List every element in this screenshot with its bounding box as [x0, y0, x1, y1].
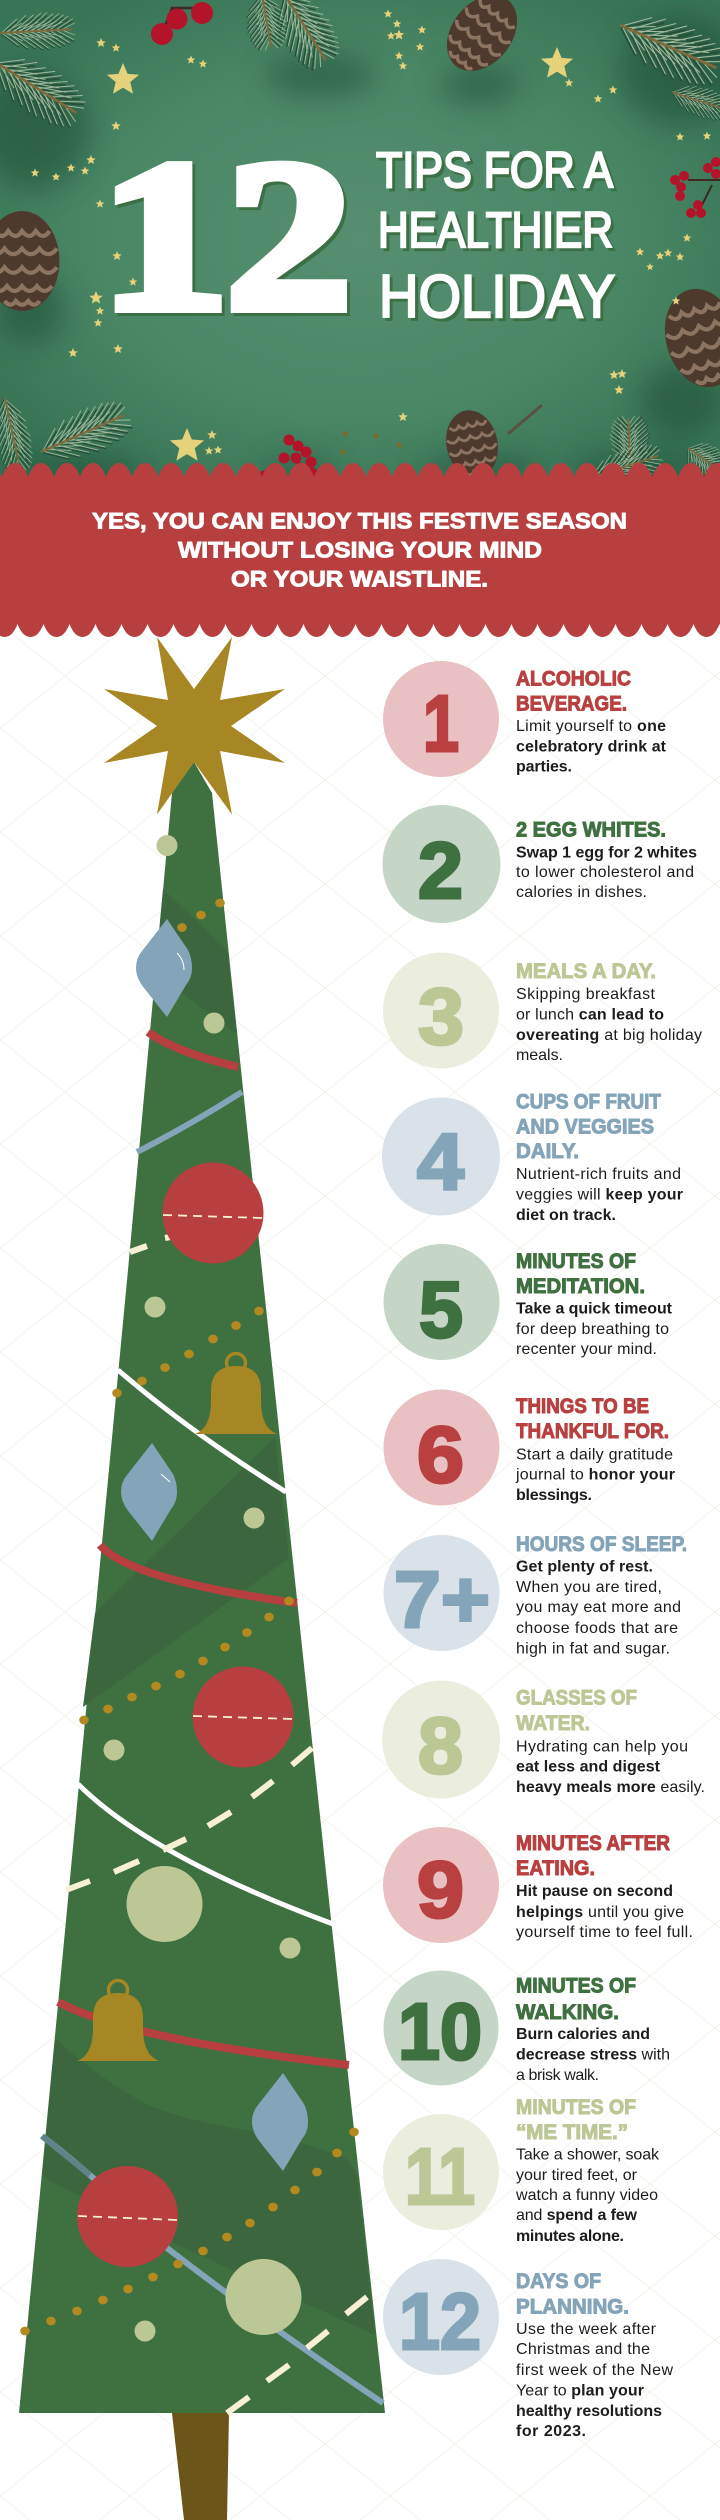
tree trunk: [172, 2413, 229, 2520]
big number 12: 1: [100, 116, 229, 355]
tip 8: GLASSES OF: [516, 1686, 637, 1710]
tip 1: parties.: [516, 758, 572, 776]
tip 7: high in fat and sugar.: [516, 1640, 670, 1658]
tree body: [19, 762, 385, 2413]
christmas tree illustration: [19, 637, 385, 2520]
tip 2: [382, 805, 697, 923]
big number 12: 2: [226, 116, 352, 355]
tip 11: watch a funny video: [515, 2187, 658, 2204]
tip 3: meals.: [516, 1047, 563, 1064]
red baubles: [77, 1162, 294, 2267]
tip 11: and spend a few: [516, 2207, 638, 2224]
banner text: YES, YOU CAN ENJOY THIS FESTIVE SEASON: [92, 508, 627, 534]
garlands: [42, 1032, 383, 2413]
tip 9: yourself time to feel full.: [516, 1924, 693, 1941]
tip 12: PLANNING.: [516, 2294, 629, 2318]
tip 11: your tired feet, or: [516, 2167, 638, 2184]
tip 11: 11: [405, 2132, 475, 2221]
tip 8: [382, 1680, 705, 1798]
tip 12: [383, 2259, 673, 2440]
tip 1: ALCOHOLIC: [516, 666, 631, 690]
tip 8: 8: [418, 1701, 463, 1790]
tip 7: [384, 1532, 687, 1658]
tip 7: When you are tired,: [516, 1579, 662, 1596]
tip 12: 12: [399, 2277, 481, 2366]
tip 3: 3: [418, 972, 464, 1061]
title words: [376, 142, 615, 330]
gold star topper: [104, 637, 285, 814]
tip 10: WALKING.: [516, 2000, 619, 2024]
tip 11: MINUTES OF: [516, 2095, 636, 2119]
tip 4: veggies will keep your: [516, 1186, 683, 1204]
tip 2: 2 EGG WHITES.: [516, 818, 666, 842]
tip 1: 1: [423, 679, 459, 768]
tip 5: [384, 1244, 673, 1360]
tip 6: blessings.: [516, 1487, 592, 1504]
tip 2: to lower cholesterol and: [516, 864, 694, 881]
tip 7: HOURS OF SLEEP.: [516, 1532, 687, 1556]
title words: HEALTHIER: [378, 202, 613, 258]
tip 10: Burn calories and: [516, 2026, 650, 2043]
tip 8: heavy meals more easily.: [516, 1779, 705, 1796]
tip 7: you may eat more and: [516, 1599, 681, 1616]
tip 12: Christmas and the: [516, 2341, 650, 2358]
tip 8: eat less and digest: [516, 1758, 661, 1776]
tip 5: recenter your mind.: [516, 1341, 657, 1358]
title words: HOLIDAY: [379, 263, 615, 330]
tip 12: Year to plan your: [516, 2382, 644, 2400]
tip 12: for 2023.: [516, 2423, 586, 2440]
darker tree shading bands: [42, 889, 375, 2335]
red scalloped banner: [0, 463, 720, 637]
tip 9: Hit pause on second: [516, 1883, 673, 1900]
tip 2: Swap 1 egg for 2 whites: [516, 844, 697, 862]
tip 5: for deep breathing to: [516, 1321, 669, 1338]
tip 4: [382, 1090, 683, 1224]
pine cones: [0, 0, 720, 483]
tip 1: [383, 661, 667, 777]
tip 10: MINUTES OF: [516, 1974, 636, 1998]
tip 7: 7+: [394, 1555, 490, 1644]
gold bells: [77, 1354, 277, 2061]
tip 1: BEVERAGE.: [516, 692, 627, 716]
tip 4: diet on track.: [516, 1207, 616, 1224]
tip 10: decrease stress with: [516, 2046, 670, 2064]
tip 10: [384, 1970, 670, 2086]
tip 12: first week of the New: [516, 2362, 673, 2379]
tip 3: Skipping breakfast: [516, 986, 656, 1003]
tip 2: 2: [418, 826, 463, 915]
tip 5: 5: [419, 1265, 463, 1354]
blue drop ornaments: [121, 919, 308, 2171]
tip 11: “ME TIME.”: [516, 2120, 628, 2144]
tip 4: Nutrient-rich fruits and: [516, 1166, 681, 1183]
tip 4: DAILY.: [516, 1139, 579, 1163]
tip 3: overeating at big holiday: [516, 1027, 702, 1044]
tip 9: [383, 1827, 693, 1943]
tip 9: EATING.: [516, 1856, 595, 1880]
gold bead strings: [20, 899, 359, 2335]
tip 12: DAYS OF: [516, 2269, 601, 2293]
tip 7: choose foods that are: [516, 1620, 678, 1637]
tip 11: [383, 2095, 660, 2245]
tip 8: Hydrating can help you: [516, 1738, 688, 1756]
red berries: [151, 2, 720, 482]
tip 9: MINUTES AFTER: [516, 1831, 670, 1855]
title words: TIPS FOR A: [376, 142, 614, 198]
tip 9: helpings until you give: [516, 1904, 684, 1921]
tip 1: Limit yourself to one: [516, 718, 666, 735]
tip 9: 9: [417, 1845, 464, 1934]
tip 6: [384, 1390, 675, 1506]
gold confetti stars: [31, 10, 711, 461]
header photo: green paper with pine, cones, berries and gold stars: [0, 0, 720, 495]
banner text: OR YOUR WAISTLINE.: [231, 566, 488, 592]
title: [100, 116, 615, 355]
tip 10: a brisk walk.: [516, 2067, 599, 2084]
tip 1: celebratory drink at: [516, 738, 667, 756]
big number 12: [100, 116, 352, 355]
tip 4: 4: [417, 1117, 465, 1206]
tip 8: WATER.: [516, 1711, 590, 1735]
sage baubles: [104, 835, 302, 2342]
tip 6: journal to honor your: [515, 1466, 675, 1484]
tip 12: healthy resolutions: [516, 2403, 662, 2420]
tip 11: Take a shower, soak: [516, 2146, 660, 2164]
banner text: WITHOUT LOSING YOUR MIND: [178, 538, 542, 562]
tip 3: [383, 952, 702, 1068]
tip 7: Get plenty of rest.: [516, 1558, 653, 1576]
banner text: [92, 508, 627, 592]
tip 6: Start a daily gratitude: [516, 1446, 673, 1464]
tip 3: MEALS A DAY.: [516, 959, 656, 983]
tip 12: Use the week after: [516, 2321, 657, 2338]
tip 5: Take a quick timeout: [516, 1300, 673, 1318]
pine branches: [0, 0, 720, 495]
tip 2: calories in dishes.: [516, 884, 647, 901]
tip 11: minutes alone.: [516, 2228, 624, 2245]
tip 5: MINUTES OF: [516, 1249, 636, 1273]
tip 5: MEDITATION.: [516, 1274, 645, 1298]
tip 4: AND VEGGIES: [516, 1114, 654, 1138]
tip 3: or lunch can lead to: [516, 1006, 664, 1024]
tip 4: CUPS OF FRUIT: [516, 1090, 661, 1114]
tip 10: 10: [398, 1987, 482, 2076]
tip 6: THINGS TO BE: [516, 1394, 649, 1418]
tip 6: 6: [417, 1410, 464, 1499]
tip 6: THANKFUL FOR.: [516, 1419, 669, 1443]
